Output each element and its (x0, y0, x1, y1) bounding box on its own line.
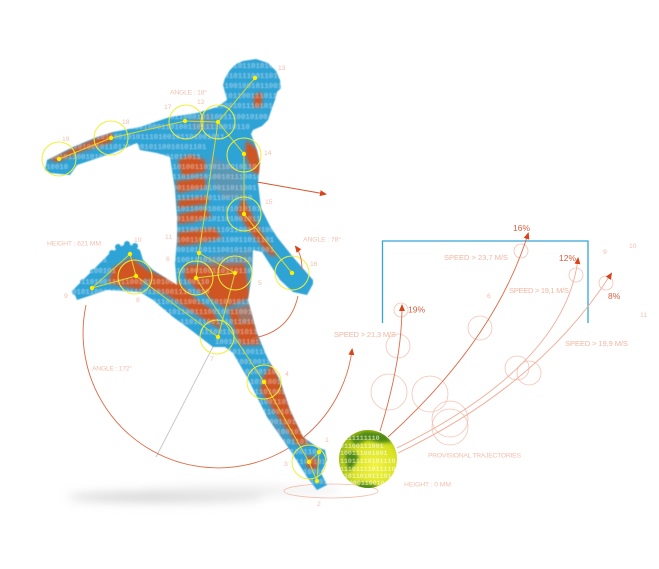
binary code texture: 110100011010011011110010110 (130, 124, 250, 132)
labels: left side: 15 (265, 199, 273, 206)
ball binary code: 1000110010 (345, 480, 385, 487)
ball binary code: 1101101011101 (340, 473, 391, 480)
labels: right side: 6 (487, 293, 491, 300)
labels: left side: 13 (278, 65, 286, 72)
labels: left side: 8 (136, 297, 140, 304)
binary code texture: 11001100110110011011101 (172, 237, 275, 245)
footballer silhouette (40, 55, 335, 495)
labels: speed readouts: SPEED > 19,9 M/S (565, 339, 628, 348)
binary code texture: 01001101 (245, 369, 281, 377)
labels: percentages (408, 223, 621, 314)
orange muscle shading (48, 92, 318, 470)
labels: right side: 9 (603, 249, 607, 256)
binary code texture: 01100101 (258, 409, 294, 417)
labels: percentages: 8% (608, 291, 621, 301)
ellipse under the foot (284, 484, 378, 498)
labels: left side: 14 (264, 150, 272, 157)
binary code texture: 1110011001011000 (200, 329, 272, 337)
body tracking skeleton (42, 76, 326, 483)
ball binary code: 1111111110 (340, 435, 380, 442)
labels: left side: 10 (134, 237, 142, 244)
angle 78 arc arrow (253, 247, 302, 338)
binary code texture: 110010110101100110101001011001 (130, 299, 264, 307)
binary code texture: 10010 (46, 164, 69, 172)
ball binary code: 01100111001 (340, 443, 384, 450)
labels: left side: 4 (285, 371, 289, 378)
labels: left side: 17 (164, 104, 172, 111)
binary code texture: 11010011010110010110 (168, 164, 257, 172)
labels: left side: ANGLE : 172° (92, 364, 132, 372)
binary code texture: 01101001 (250, 389, 286, 397)
ground shadow (67, 486, 340, 502)
labels: right side: PROVISIONAL TRAJECTORIES (428, 452, 521, 460)
binary code texture: 1101 (90, 247, 108, 255)
labels: right side: 10 (629, 243, 637, 250)
joint dots (57, 76, 321, 483)
binary code texture: 0010110010100110011111011001011011 (50, 154, 201, 162)
labels: left side: 9 (64, 293, 68, 300)
binary code texture: 01001110110010111010 (172, 257, 261, 265)
labels: left side (47, 65, 341, 508)
binary code texture: 10001011101011 (215, 103, 278, 111)
labels: speed readouts: SPEED > 21,3 M/S (334, 330, 396, 339)
binary code texture: 11011100111011010010 (180, 319, 269, 327)
labels: left side: 12 (197, 99, 205, 106)
binary code texture: 10010011011001 (215, 339, 278, 347)
binary code texture: 1100101 (295, 459, 327, 467)
trajectory arrows (380, 234, 611, 453)
labels: percentages: 19% (408, 304, 425, 314)
skeleton lines (59, 78, 319, 481)
labels: speed readouts: SPEED > 23,7 M/S (444, 253, 508, 262)
binary code texture: 00101100111011 (215, 93, 278, 101)
labels: left side: 3 (284, 461, 288, 468)
ball dark patches (345, 431, 392, 492)
angle 172 radius line (156, 337, 218, 457)
binary code texture: 1001101 (265, 419, 297, 427)
binary code texture (46, 63, 333, 487)
provisional trajectory rings (371, 244, 613, 445)
binary code texture: 1011001101 (228, 349, 273, 357)
binary code texture: 11001001011001 (220, 83, 283, 91)
binary code texture: 10110011011101100110100 (172, 227, 275, 235)
labels: left side: 6 (166, 256, 170, 263)
labels: right side: HEIGHT : 0 MM (404, 482, 451, 488)
labels: left side: HEIGHT : 621 MM (47, 240, 101, 248)
ball binary code: 100111001001 (340, 450, 388, 457)
binary code texture: 01010110101011 (220, 63, 283, 71)
binary code texture: 11010010011011011001 (172, 268, 261, 276)
binary code texture: 1001101 (290, 449, 322, 457)
ball binary code: 11101111011110 (340, 466, 395, 473)
labels: left side: 19 (62, 136, 70, 143)
binary code texture: 1011010011011001011010011100110 (72, 279, 210, 287)
binary code texture: 100101 (303, 469, 330, 477)
chest direction arrow (257, 182, 325, 194)
labels: right side: 11 (640, 312, 647, 319)
labels: speed readouts (334, 253, 628, 348)
labels: left side: 16 (310, 261, 318, 268)
labels: left side: 1 (325, 437, 329, 444)
binary code texture: 0110001011001110010100 (170, 114, 268, 122)
binary code texture: 10011 (85, 257, 108, 265)
binary code texture: 11001101 (255, 399, 291, 407)
ball binary code (340, 435, 395, 487)
binary code texture: 1100101 (85, 268, 117, 276)
angle 172 arc arrow (83, 305, 352, 468)
binary code texture: 101101001011011100010110010101101 (60, 144, 207, 152)
binary code texture: 10011001010011011001 (168, 185, 257, 193)
goal frame (382, 241, 588, 323)
labels: right side (404, 243, 647, 488)
binary code texture: 01011000100101010101 (172, 206, 261, 214)
binary code texture: 0110100101001011100101 (168, 174, 266, 182)
grey blending patches (190, 112, 290, 450)
binary code texture: 10010011 (235, 359, 271, 367)
binary code texture: 10011011001110010011001011 (150, 309, 266, 317)
binary code texture: 101101 (282, 439, 309, 447)
binary code texture: 00110100101101001011 (172, 216, 261, 224)
ball binary code: 11011110101110 (340, 458, 395, 465)
binary code texture: 10011 (310, 479, 333, 487)
binary code texture: 1111110100110010110 (168, 195, 253, 203)
football (339, 430, 397, 492)
binary code texture: 1100101 (272, 429, 304, 437)
binary code texture: 10010110111001011011001 (172, 247, 275, 255)
labels: left side: 7 (210, 356, 214, 363)
labels: left side: ANGLE : 18° (170, 88, 207, 96)
binary code texture: 0101100110010111011010011101010 (72, 289, 210, 297)
joint rings (42, 105, 326, 479)
labels: percentages: 12% (559, 253, 576, 263)
labels: left side: ANGLE : 78° (303, 236, 341, 244)
binary code texture: 10110010101110100101101001011 (96, 134, 225, 142)
labels: speed readouts: SPEED > 19,1 M/S (509, 286, 569, 295)
binary code texture: 10101110011011 (220, 73, 283, 81)
labels: left side: 18 (122, 119, 130, 126)
labels: percentages: 16% (513, 223, 530, 233)
labels: left side: 5 (258, 280, 262, 287)
binary code texture: 10110011 (250, 379, 286, 387)
labels: left side: 2 (317, 501, 321, 508)
labels: left side: 11 (165, 234, 172, 241)
